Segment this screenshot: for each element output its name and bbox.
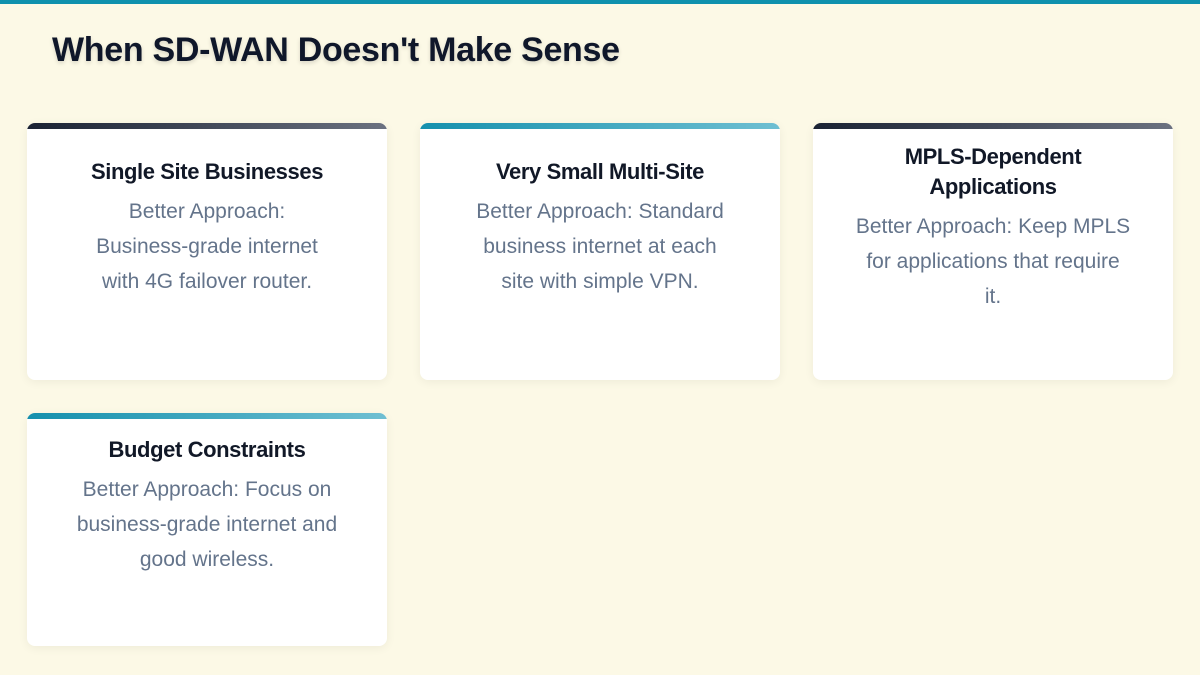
body text: with 4G failover router. [102, 270, 312, 293]
heading: MPLS-Dependent [905, 144, 1081, 169]
body text: business internet at each [483, 235, 717, 258]
body text: site with simple VPN. [501, 270, 699, 293]
heading [905, 144, 1082, 199]
body text: for applications that require [866, 250, 1120, 273]
body text: Better Approach: [129, 200, 285, 223]
card: MPLS-dependent applications [813, 123, 1173, 380]
body text: good wireless. [140, 548, 274, 571]
body text: Better Approach: Focus on [83, 478, 331, 501]
card: very small multi-site [420, 123, 780, 380]
body text: business-grade internet and [77, 513, 337, 536]
body text [476, 200, 724, 293]
title: When SD-WAN Doesn't Make Sense [52, 31, 620, 69]
body text [96, 200, 318, 293]
body text [77, 478, 337, 571]
body text: Better Approach: Keep MPLS [856, 215, 1130, 238]
heading: Single Site Businesses [91, 159, 323, 184]
body text: it. [985, 285, 1001, 308]
card: single site businesses [27, 123, 387, 380]
body text [856, 215, 1130, 308]
heading: Applications [929, 174, 1057, 199]
heading: Budget Constraints [109, 437, 305, 462]
card: budget constraints [27, 413, 387, 646]
heading: Very Small Multi-Site [496, 159, 704, 184]
body text: Business-grade internet [96, 235, 318, 258]
body text: Better Approach: Standard [476, 200, 724, 223]
